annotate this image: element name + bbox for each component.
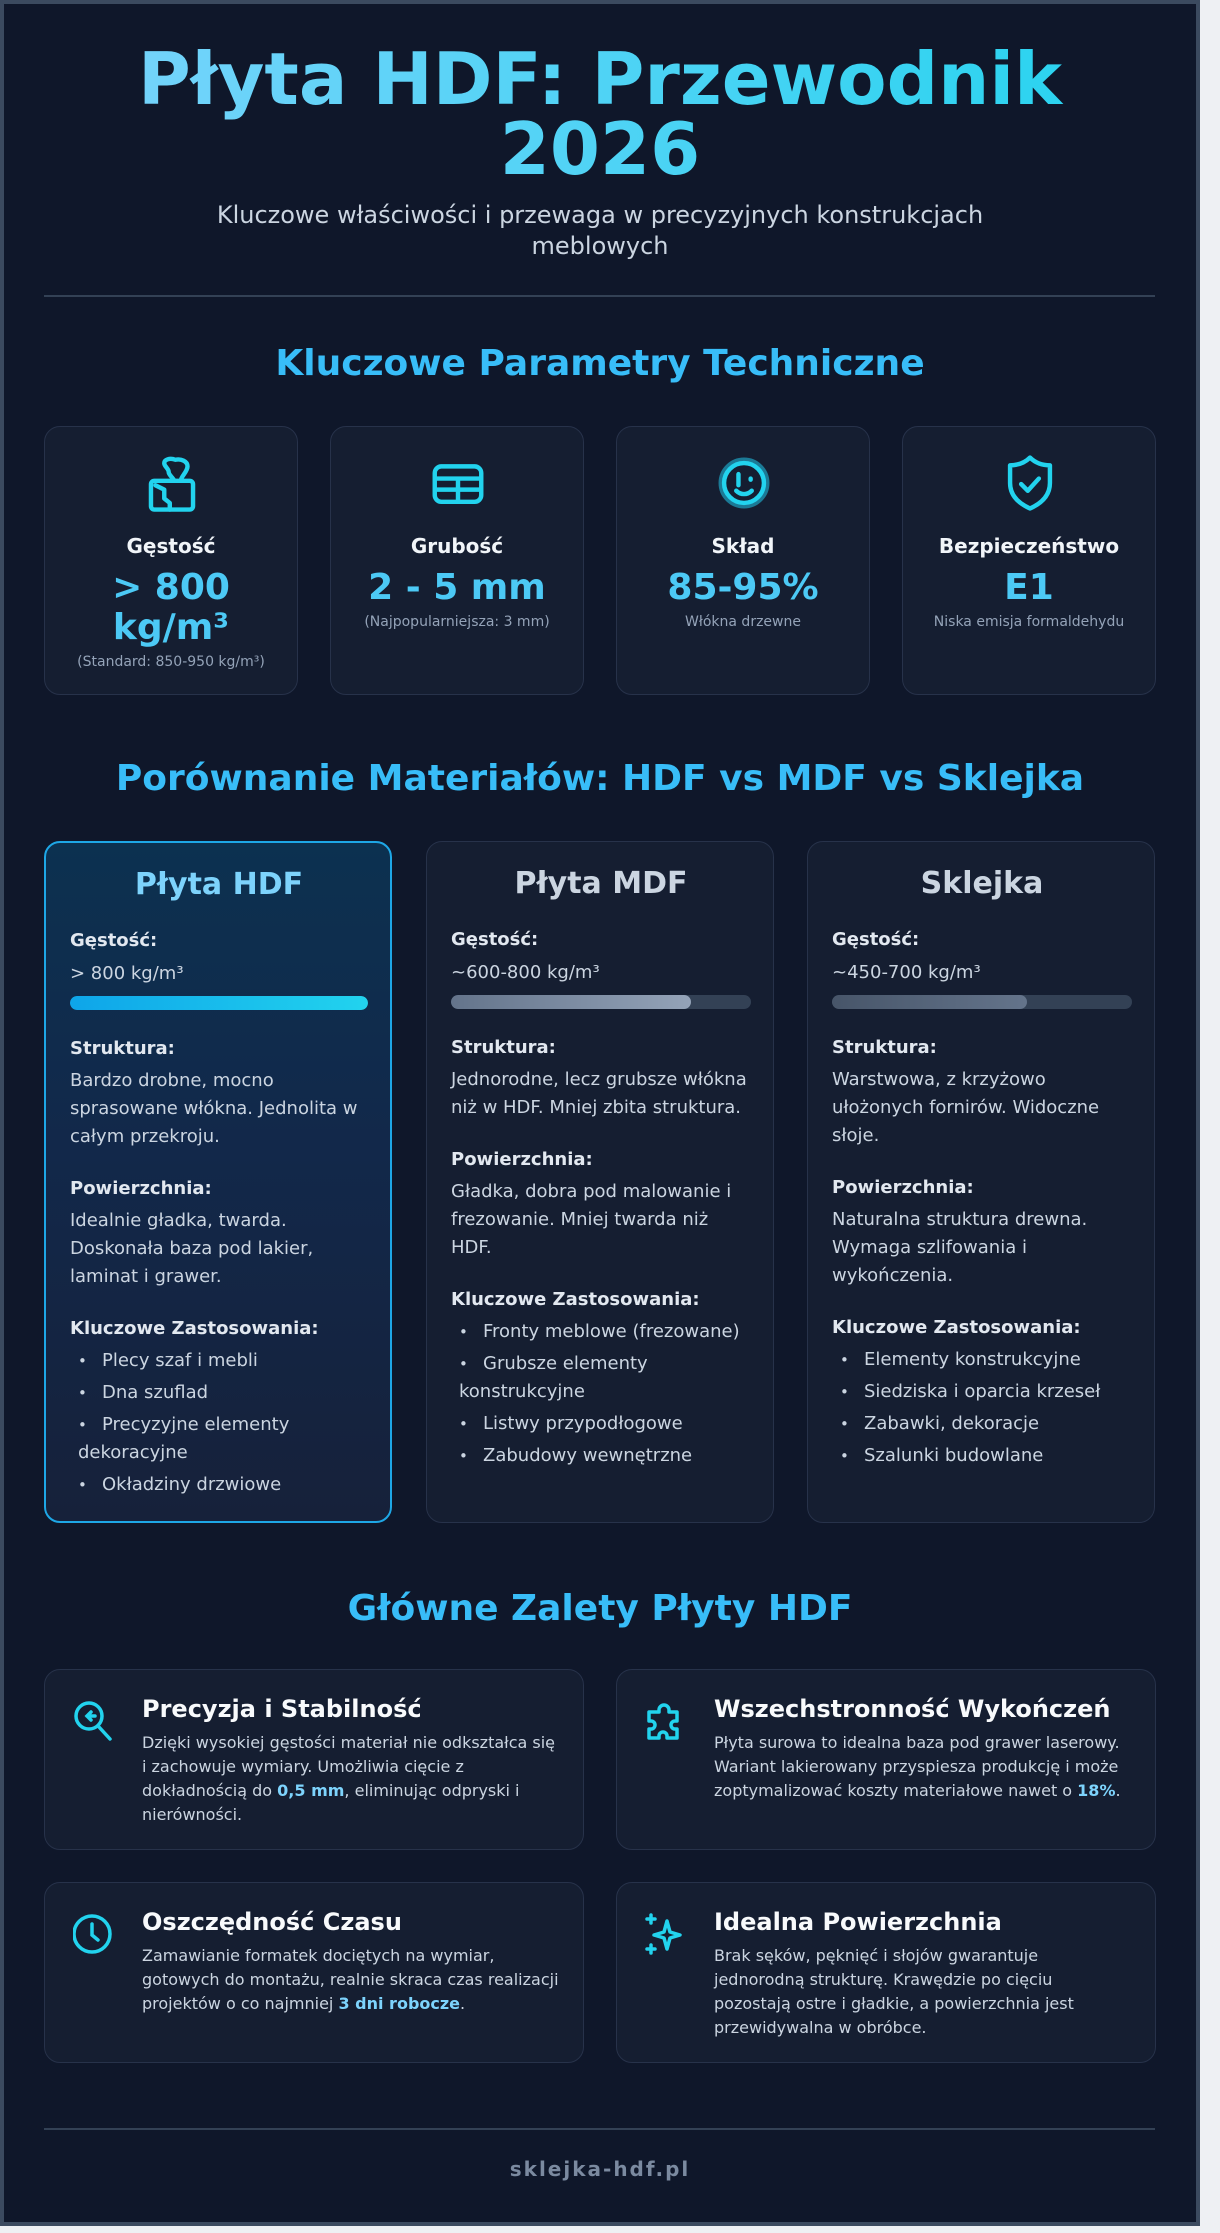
- panel: HDF: [44, 841, 392, 1523]
- panel: Sklejka: Elementy konstrukcyjne: [864, 1349, 1081, 1370]
- icon: layers: [432, 464, 484, 504]
- panel: MDF: Powierzchnia:: [451, 1149, 593, 1170]
- panel: MDF: Listwy przypodłogowe: [483, 1413, 683, 1434]
- title: Płyta HDF: Przewodnik: [138, 37, 1062, 121]
- panel: bezpieczeństwo: E1: [1004, 567, 1054, 608]
- panel: HDF: Struktura:: [70, 1038, 175, 1059]
- bar: MDF density: [451, 995, 751, 1009]
- panel: HDF: Powierzchnia:: [70, 1178, 212, 1199]
- panel: gęstość: kg/m³: [113, 607, 229, 648]
- panel: powierzchnia: [616, 1882, 1156, 2063]
- panel: skład: Skład: [712, 534, 774, 558]
- panel: MDF: Zabudowy wewnętrzne: [483, 1445, 692, 1466]
- panel: HDF: Gęstość:: [70, 930, 157, 951]
- panel: Sklejka: Powierzchnia:: [832, 1177, 974, 1198]
- subtitle: Kluczowe właściwości i przewaga w precyzyjnych konstrukcjach meblowych: [217, 201, 983, 260]
- title: 2026: [500, 107, 700, 191]
- panel: bezpieczeństwo: Bezpieczeństwo: [939, 534, 1119, 558]
- panel: wszechstronność: [616, 1669, 1156, 1850]
- panel: Sklejka: Warstwowa, z krzyżowo ułożonych fornirów. Widoczne słoje.: [832, 1069, 1099, 1146]
- bar: HDF density: [70, 996, 368, 1010]
- panel: HDF: Plecy szaf i mebli: [102, 1350, 258, 1371]
- panel: HDF: Precyzyjne elementy dekoracyjne: [78, 1414, 289, 1463]
- panel: Sklejka: Siedziska i oparcia krzeseł: [864, 1381, 1100, 1402]
- panel: HDF: Kluczowe Zastosowania:: [70, 1318, 319, 1339]
- panel: HDF: Dna szuflad: [102, 1382, 208, 1403]
- icon: puzzle: [647, 1703, 679, 1740]
- panel: oszczędność: [44, 1882, 584, 2063]
- panel: oszczędność: Oszczędność Czasu: [142, 1908, 402, 1936]
- panel: Sklejka: Kluczowe Zastosowania:: [832, 1317, 1081, 1338]
- title: [4, 44, 1196, 184]
- panel: HDF: > 800 kg/m³: [70, 963, 184, 984]
- panel: skład: Włókna drzewne: [685, 614, 801, 630]
- panel: gęstość: (Standard: 850-950 kg/m³): [77, 654, 265, 670]
- panel: skład: 85-95%: [667, 567, 819, 608]
- panel: grubość: [330, 426, 584, 695]
- panel: Sklejka: Naturalna struktura drewna. Wymaga szlifowania i wykończenia.: [832, 1209, 1087, 1286]
- panel: Sklejka: Zabawki, dekoracje: [864, 1413, 1039, 1434]
- panel: precyzja: [44, 1669, 584, 1850]
- panel: MDF: [426, 841, 774, 1523]
- panel: MDF: Gęstość:: [451, 929, 538, 950]
- panel: powierzchnia: Idealna Powierzchnia: [714, 1908, 1002, 1936]
- panel: MDF: Jednorodne, lecz grubsze włókna niż w HDF. Mniej zbita struktura.: [451, 1069, 747, 1118]
- panel: Sklejka: Struktura:: [832, 1037, 937, 1058]
- panel: precyzja: Dzięki wysokiej gęstości materiał nie odkształca się i zachowuje wymiary. Umożliwia cięcie z dokładnością do 0,5 mm, eliminując odpryski i nierówności.: [142, 1733, 555, 1824]
- panel: MDF: Fronty meblowe (frezowane): [483, 1321, 740, 1342]
- footer: sklejka-hdf.pl: [510, 2157, 690, 2181]
- panel: HDF: Idealnie gładka, twarda. Doskonała baza pod lakier, laminat i grawer.: [70, 1210, 313, 1287]
- panel: bezpieczeństwo: Niska emisja formaldehydu: [934, 614, 1124, 630]
- panel: HDF: Bardzo drobne, mocno sprasowane włókna. Jednolita w całym przekroju.: [70, 1070, 358, 1147]
- panel: gęstość: > 800: [112, 567, 230, 608]
- panel: grubość: 2 - 5 mm: [368, 567, 546, 608]
- icon: search: [74, 1701, 112, 1741]
- panel: wszechstronność: Płyta surowa to idealna baza pod grawer laserowy. Wariant lakierowany przyspiesza produkcję i może zoptymalizować koszty materiałowe nawet o 18%.: [714, 1733, 1121, 1800]
- panel: precyzja: Precyzja i Stabilność: [142, 1695, 422, 1723]
- panel: powierzchnia: Brak sęków, pęknięć i słojów gwarantuje jednorodną strukturę. Krawędzie po cięciu pozostają ostre i gładkie, a powierzchnia jest przewidywalna w obróbce.: [714, 1946, 1074, 2037]
- panel: MDF: ~600-800 kg/m³: [451, 962, 600, 983]
- icon: clock: [73, 1914, 112, 1954]
- bar: sklejka density: [832, 995, 1132, 1009]
- panel: MDF: Struktura:: [451, 1037, 556, 1058]
- panel: MDF: Grubsze elementy konstrukcyjne: [459, 1353, 648, 1402]
- panel: skład: [616, 426, 870, 695]
- panel: MDF: Gładka, dobra pod malowanie i frezowanie. Mniej twarda niż HDF.: [451, 1181, 731, 1258]
- heading: zalety: Główne Zalety Płyty HDF: [348, 1588, 852, 1629]
- panel: oszczędność: Zamawianie formatek dociętych na wymiar, gotowych do montażu, realnie skraca czas realizacji projektów o co najmniej 3 dni robocze.: [142, 1946, 559, 2013]
- panel: MDF: Płyta MDF: [515, 866, 687, 901]
- heading: porównanie: Porównanie Materiałów: HDF vs MDF vs Sklejka: [116, 758, 1084, 799]
- icon: face: [718, 458, 770, 508]
- heading: parametry: Kluczowe Parametry Techniczne: [275, 343, 925, 384]
- panel: wszechstronność: Wszechstronność Wykończeń: [714, 1695, 1110, 1723]
- panel: Sklejka: ~450-700 kg/m³: [832, 962, 981, 983]
- panel: Sklejka: [807, 841, 1155, 1523]
- panel: Sklejka: Gęstość:: [832, 929, 919, 950]
- panel: HDF: Płyta HDF: [135, 867, 303, 902]
- panel: grubość: Grubość: [411, 534, 503, 558]
- panel: bezpieczeństwo: [902, 426, 1156, 695]
- panel: Sklejka: Szalunki budowlane: [864, 1445, 1043, 1466]
- icon: package: [148, 456, 196, 512]
- panel: MDF: Kluczowe Zastosowania:: [451, 1289, 700, 1310]
- icon: sparkles: [645, 1913, 682, 1955]
- icon: shield: [1008, 455, 1052, 511]
- panel: Sklejka: Sklejka: [921, 866, 1043, 901]
- panel: HDF: Okładziny drzwiowe: [102, 1474, 281, 1495]
- panel: gęstość: [44, 426, 298, 695]
- panel: gęstość: Gęstość: [127, 534, 215, 558]
- panel: grubość: (Najpopularniejsza: 3 mm): [364, 614, 550, 630]
